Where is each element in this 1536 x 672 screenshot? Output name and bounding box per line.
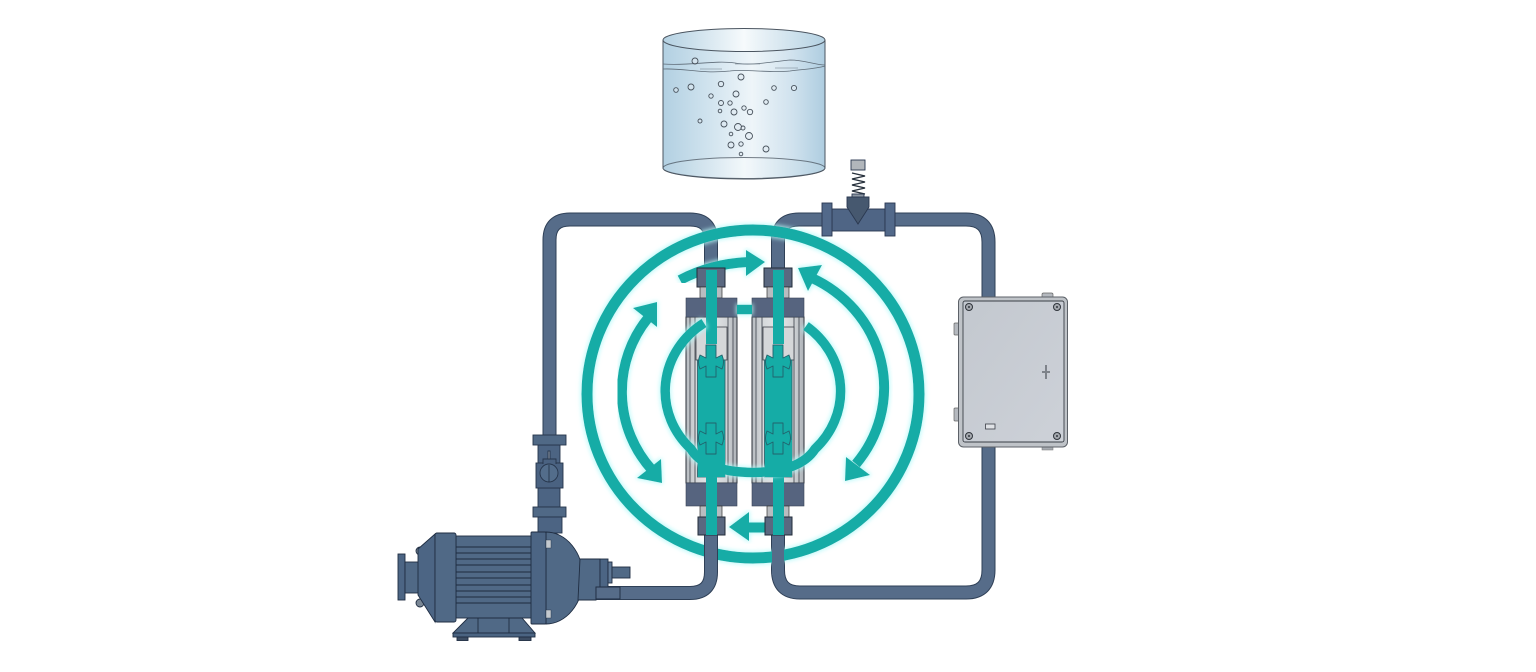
pipe: right return loop <box>778 220 988 592</box>
control box <box>954 293 1068 450</box>
lower flow block <box>698 440 792 477</box>
gate valve <box>533 435 566 533</box>
inner circulation ring <box>665 310 841 472</box>
pipe: left riser <box>550 220 711 440</box>
flow tube: right <box>752 268 804 535</box>
indicator <box>986 424 995 429</box>
water tank <box>663 29 825 179</box>
relief valve <box>822 160 895 236</box>
right arc arrow <box>798 265 884 481</box>
bottom arrow <box>729 512 766 541</box>
outer circulation ring <box>587 230 919 558</box>
top arc arrow <box>680 250 765 280</box>
flow tube: left <box>686 268 737 535</box>
pipe: pump discharge <box>596 534 711 593</box>
bubbles <box>674 58 797 156</box>
switch symbol <box>1042 365 1050 379</box>
impellers <box>698 345 790 454</box>
pipe stub: right lower <box>772 534 784 575</box>
spring <box>852 173 865 194</box>
centrifugal pump <box>398 532 630 640</box>
left arc arrow <box>622 302 662 483</box>
screws <box>966 304 1060 440</box>
